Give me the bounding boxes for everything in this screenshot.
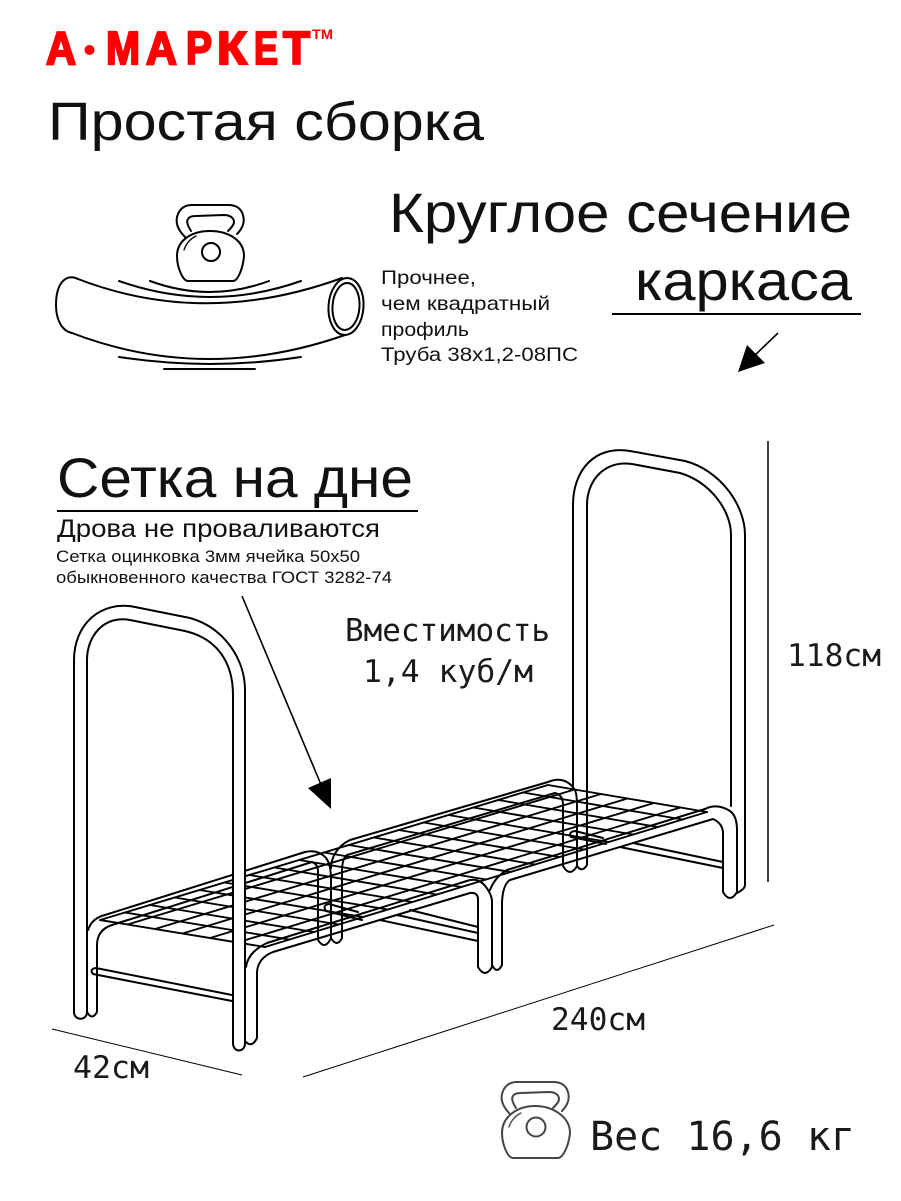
- logo: М: [106, 22, 140, 74]
- heading: round section: [389, 181, 853, 312]
- icon: kettlebell on bending pipe: [56, 205, 365, 369]
- pipe description: [381, 267, 578, 366]
- rear cross bars: [380, 843, 723, 941]
- pipe description: Труба 38х1,2-08ПС: [381, 344, 578, 366]
- capacity: 1,4 куб/м: [363, 654, 533, 690]
- dimension: length: [303, 925, 774, 1077]
- logo: Р: [186, 22, 212, 74]
- rear frame ends: [331, 780, 577, 943]
- kettlebell: [177, 205, 244, 281]
- title: Простая сборка: [48, 92, 485, 152]
- floor mesh: [100, 785, 707, 947]
- first frame section: [87, 851, 331, 1016]
- front frame rails: [246, 806, 737, 1044]
- logo: А: [46, 22, 76, 74]
- logo: [46, 22, 333, 74]
- arrow: to frame: [738, 333, 778, 372]
- dimension: width: 42см: [73, 1050, 149, 1086]
- weight label: Вес 16,6 кг: [590, 1114, 855, 1160]
- low cross bar front: [92, 968, 232, 1001]
- mesh description: обыкновенного качества ГОСТ 3282-74: [56, 568, 392, 587]
- heading: mesh: Сетка на дне: [57, 446, 413, 509]
- capacity: Вместимость: [345, 613, 550, 649]
- pipe description: профиль: [381, 319, 469, 341]
- arrow: to mesh: [242, 596, 331, 809]
- logo: Т: [283, 22, 310, 74]
- pipe description: чем квадратный: [381, 293, 550, 315]
- logo: Е: [254, 22, 278, 74]
- bend marks: [119, 281, 301, 369]
- logo: А: [146, 22, 177, 74]
- logo: ТМ: [312, 26, 333, 42]
- dimension: width: [52, 1029, 242, 1086]
- rear arch: [573, 450, 745, 893]
- heading: round section: каркаса: [635, 249, 853, 312]
- mesh description: Сетка оцинковка 3мм ячейка 50х50: [56, 547, 360, 566]
- pipe description: Прочнее,: [381, 267, 476, 289]
- logo: К: [217, 22, 248, 74]
- front arch: [74, 606, 245, 1050]
- capacity: [345, 613, 550, 690]
- heading: round section: Круглое сечение: [389, 181, 852, 244]
- mesh description: Дрова не проваливаются: [57, 515, 380, 543]
- dimension: length: 240см: [551, 1002, 645, 1038]
- icon: kettlebell weight: [502, 1082, 570, 1158]
- mesh description: [56, 515, 392, 587]
- bars over mesh: [325, 831, 606, 920]
- dimension: height: 118см: [787, 638, 881, 674]
- woodshed drawing: [74, 450, 745, 1050]
- pipe: [56, 277, 365, 359]
